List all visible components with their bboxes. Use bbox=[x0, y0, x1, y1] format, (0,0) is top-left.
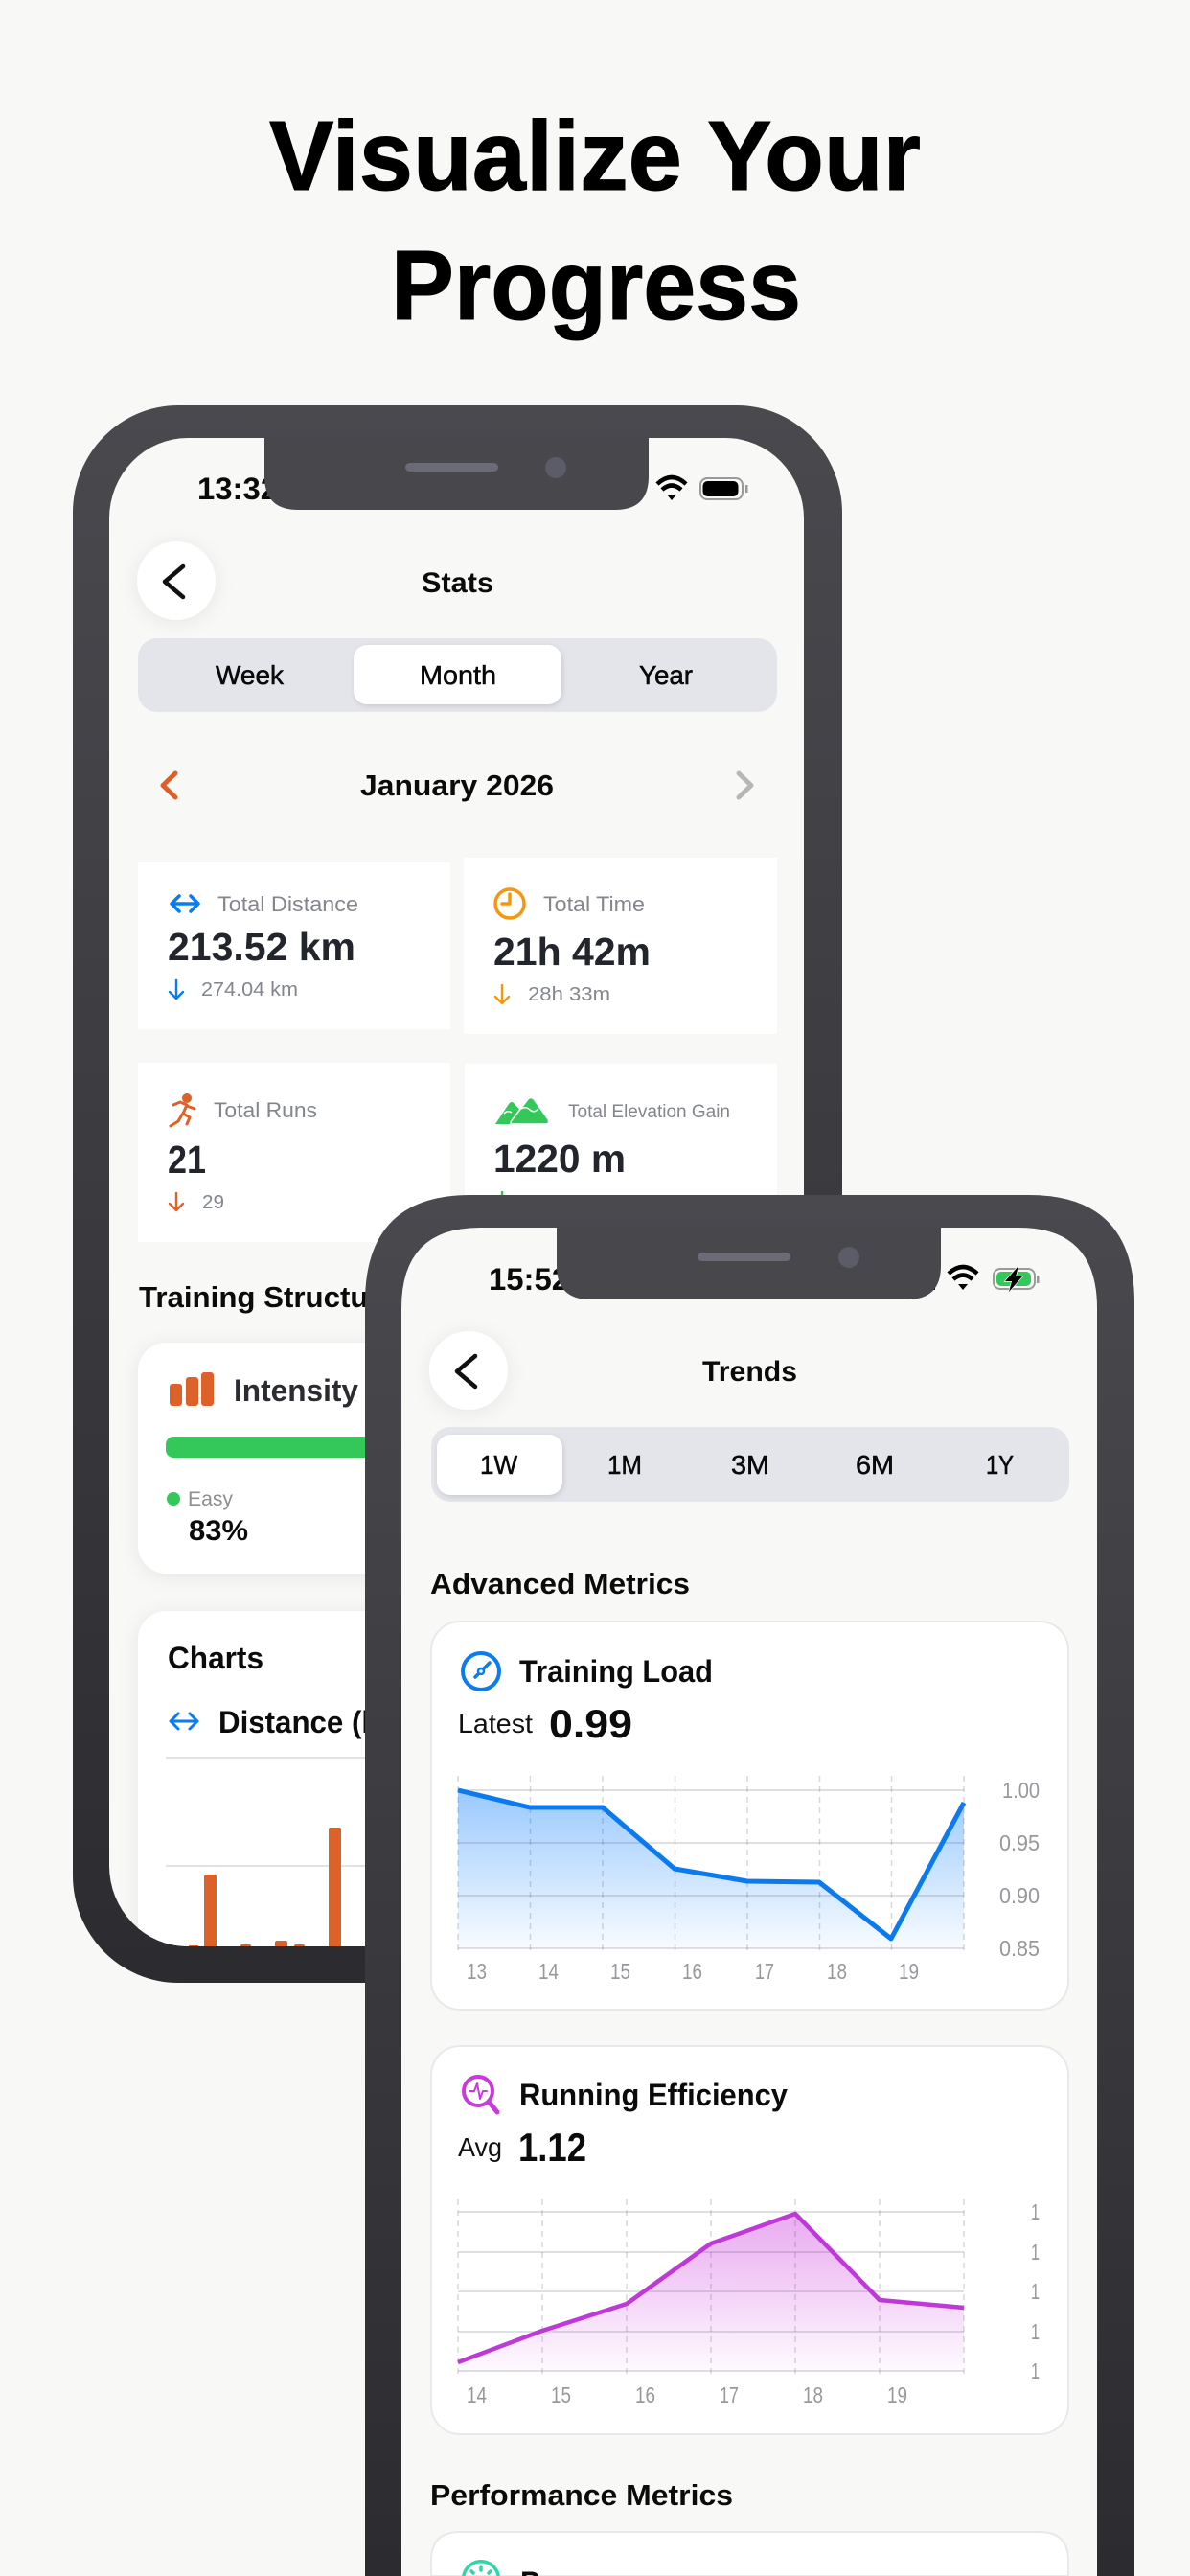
segmented control: range: 1M bbox=[607, 1450, 642, 1480]
screen: trends bbox=[401, 1228, 1097, 2576]
line chart: training load: 1.00 bbox=[1002, 1778, 1040, 1803]
icon: clock bbox=[495, 889, 524, 918]
segmented control: period bbox=[138, 638, 777, 712]
segmented control: range: 6M bbox=[856, 1450, 894, 1480]
stat card: total distance bbox=[138, 862, 450, 1029]
notch bbox=[557, 1228, 941, 1300]
line chart: training load: 17 bbox=[755, 1959, 774, 1984]
icon: runner bbox=[171, 1094, 195, 1126]
icon: wifi bbox=[949, 1267, 977, 1290]
line chart: running efficiency bbox=[458, 2199, 1040, 2407]
line chart: running efficiency: 1 bbox=[1031, 2240, 1040, 2265]
card: charts: Distance (km) bbox=[218, 1705, 415, 1739]
line chart: running efficiency: 19 bbox=[887, 2382, 907, 2407]
line chart: running efficiency: 15 bbox=[551, 2382, 571, 2407]
line chart: running efficiency: 14 bbox=[467, 2382, 487, 2407]
stat card: total runs: Total Runs bbox=[214, 1098, 317, 1122]
title: Progress bbox=[391, 230, 801, 340]
phone frame bbox=[73, 405, 842, 1983]
line chart: training load: 14 bbox=[538, 1959, 559, 1984]
line chart: training load bbox=[458, 1776, 1040, 1984]
heading: training structure: Training Structure bbox=[139, 1280, 397, 1314]
screen title: Trends: Trends bbox=[702, 1356, 797, 1388]
line chart: training load: 16 bbox=[682, 1959, 702, 1984]
line chart: training load: 15 bbox=[610, 1959, 630, 1984]
segmented control: range bbox=[431, 1427, 1069, 1502]
stat card: total distance: 274.04 km bbox=[201, 979, 298, 1000]
bar chart: distance bbox=[166, 1757, 365, 1946]
card: pace bbox=[431, 2532, 1068, 2576]
icon: charging battery bbox=[994, 1266, 1039, 1292]
stat card: total time bbox=[464, 858, 777, 1034]
notch bbox=[264, 438, 649, 510]
stat card: total time: Total Time bbox=[543, 892, 645, 916]
line chart: training load: 0.90 bbox=[999, 1883, 1040, 1908]
screen title: Stats: Stats bbox=[422, 567, 493, 599]
segmented control: period: Month bbox=[420, 660, 496, 690]
icon: intensity bars bbox=[170, 1372, 214, 1406]
segmented control: range: 1Y bbox=[986, 1450, 1014, 1480]
icon: distance arrows bbox=[172, 896, 198, 911]
line chart: training load: 13 bbox=[467, 1959, 487, 1984]
line chart: running efficiency: 1 bbox=[1031, 2279, 1040, 2304]
stat card: total runs bbox=[138, 1063, 450, 1242]
card: running efficiency: Running Efficiency bbox=[519, 2078, 788, 2112]
screen: stats bbox=[109, 438, 804, 2090]
back button bbox=[429, 1331, 508, 1410]
card: intensity bbox=[138, 1343, 365, 1577]
title bbox=[269, 101, 921, 340]
card: intensity: Easy bbox=[188, 1488, 234, 1510]
stat card: total time: 28h 33m bbox=[528, 984, 610, 1005]
card: training load: 0.99 bbox=[549, 1701, 632, 1746]
stat card: total elevation gain: Total Elevation Gain bbox=[568, 1102, 730, 1122]
title: Visualize Your bbox=[269, 101, 921, 211]
card: running efficiency: Avg bbox=[458, 2132, 502, 2162]
heading: performance metrics: Performance Metrics bbox=[430, 2478, 733, 2512]
line chart: running efficiency: 18 bbox=[803, 2382, 823, 2407]
icon: pace gauge bbox=[464, 2562, 498, 2575]
card: charts: Charts bbox=[168, 1641, 263, 1675]
icon: mountains bbox=[495, 1098, 549, 1124]
card: intensity: 83% bbox=[189, 1515, 248, 1547]
line chart: running efficiency: 17 bbox=[720, 2382, 739, 2407]
card: training load: Training Load bbox=[519, 1654, 713, 1689]
line chart: running efficiency: 1 bbox=[1031, 2319, 1040, 2344]
card: running efficiency bbox=[431, 2046, 1068, 2434]
month navigator bbox=[163, 769, 751, 802]
camera bbox=[545, 457, 566, 478]
speaker bbox=[405, 463, 498, 472]
card: running efficiency: 1.12 bbox=[518, 2125, 586, 2170]
icon: wifi bbox=[657, 477, 686, 500]
card: training load bbox=[431, 1622, 1068, 2010]
status time: 13:32 bbox=[197, 472, 278, 506]
speaker bbox=[698, 1253, 790, 1261]
back button bbox=[137, 541, 216, 620]
card: charts bbox=[138, 1611, 365, 1946]
stat card: total elevation gain: 1220 m bbox=[493, 1137, 626, 1181]
status time: 15:52 bbox=[489, 1262, 569, 1297]
signal fragment bbox=[933, 1288, 935, 1290]
camera bbox=[838, 1247, 859, 1268]
stat card: total time: 21h 42m bbox=[493, 930, 651, 974]
line chart: training load: 18 bbox=[827, 1959, 847, 1984]
icon: battery bbox=[700, 478, 747, 499]
stat card: total elevation gain bbox=[465, 1064, 777, 1195]
heading: advanced metrics: Advanced Metrics bbox=[430, 1567, 690, 1600]
segmented control: range: 3M bbox=[731, 1450, 769, 1480]
card: training load: Latest bbox=[458, 1709, 533, 1738]
phone frame bbox=[365, 1195, 1134, 2576]
stat card: total distance: Total Distance bbox=[217, 892, 358, 916]
line chart: training load: 0.85 bbox=[999, 1936, 1040, 1961]
stat card: total runs: 21 bbox=[168, 1138, 206, 1182]
segmented control: range: 1W bbox=[480, 1450, 518, 1480]
line chart: training load: 0.95 bbox=[999, 1830, 1040, 1855]
line chart: running efficiency: 16 bbox=[635, 2382, 655, 2407]
card: intensity: Intensity bbox=[234, 1373, 358, 1408]
line chart: running efficiency: 1 bbox=[1031, 2199, 1040, 2224]
icon: magnifier pulse bbox=[464, 2077, 497, 2112]
segmented control: period: Year bbox=[639, 660, 693, 690]
phone: trends screen bbox=[365, 1195, 1134, 2576]
line chart: running efficiency: 1 bbox=[1031, 2358, 1040, 2383]
stat card: total distance: 213.52 km bbox=[168, 925, 355, 969]
segmented control: period: Week bbox=[216, 660, 285, 690]
stat card: total elevation gain: 2500 bbox=[530, 1192, 573, 1213]
line chart: training load: 19 bbox=[899, 1959, 919, 1984]
phone: stats screen bbox=[73, 405, 842, 2090]
icon: gauge bbox=[463, 1653, 499, 1690]
icon: distance arrows bbox=[171, 1714, 197, 1729]
stat card: total runs: 29 bbox=[202, 1192, 224, 1213]
month navigator: January 2026 bbox=[360, 769, 554, 802]
